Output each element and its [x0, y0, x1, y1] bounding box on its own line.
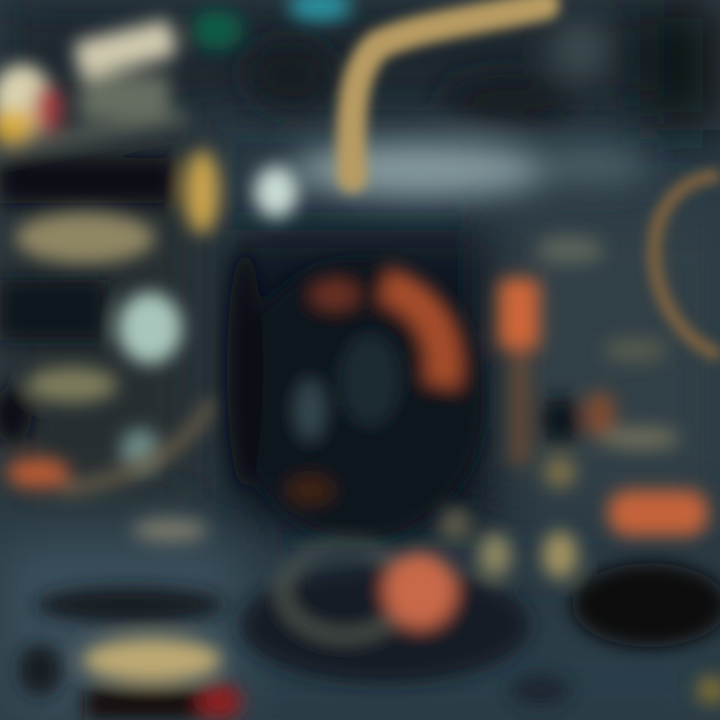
- icon: white and yellow sphere: [0, 64, 62, 141]
- tan knob faint: [439, 507, 471, 543]
- dark shelf interior: [0, 158, 175, 203]
- top left shelf objects: [0, 0, 352, 472]
- shelf edge: [0, 111, 189, 157]
- core highlight: [340, 334, 400, 426]
- tan block middle: [26, 367, 118, 403]
- red object bottom: [198, 684, 242, 720]
- lower dish and spheres: [240, 507, 720, 706]
- tan curved strut: [60, 400, 212, 490]
- tan spot: [544, 456, 576, 488]
- small pale sphere: [120, 428, 160, 472]
- dark top cavity: [245, 40, 335, 110]
- dark base under cylinder: [85, 688, 200, 720]
- yellow cylinder: [184, 150, 220, 234]
- cream knob two: [542, 531, 578, 579]
- yellow spot bottom right: [696, 676, 720, 704]
- brown column: [510, 355, 530, 465]
- orange capsule right: [608, 490, 708, 536]
- pipe: tan bent tube: [351, 5, 545, 178]
- orange coil: [385, 285, 444, 385]
- cream cylinder bottom: [82, 638, 222, 682]
- green object: [191, 10, 243, 50]
- tan strip lower: [132, 518, 208, 542]
- dark column left of engine: [227, 250, 263, 490]
- pale horizontal band: [290, 142, 550, 198]
- dark lower right mass: [572, 563, 720, 647]
- pale green sphere: [118, 292, 182, 364]
- orange sphere: [384, 552, 456, 628]
- white glow: [254, 166, 298, 218]
- orange capsule left: [6, 457, 70, 489]
- dark spot left: [0, 387, 32, 443]
- central dark engine with orange coil: [227, 236, 708, 540]
- small orange spot: [584, 391, 616, 439]
- shelf base: [80, 75, 170, 120]
- ring: tan arc on right edge: [654, 175, 720, 355]
- side highlight: [296, 380, 324, 440]
- tan strips on right: [600, 427, 680, 449]
- dish ring: [283, 544, 407, 636]
- orange rectangular block: [498, 278, 540, 350]
- cream knob one: [478, 533, 512, 577]
- red-brown glow low: [286, 476, 334, 504]
- dark band lower left: [35, 587, 225, 623]
- tan block upper: [15, 212, 155, 264]
- grey upper patch: [550, 20, 610, 80]
- dish dark shell: [240, 567, 530, 683]
- pale band right: [530, 147, 650, 183]
- dark spot lower left: [18, 644, 62, 696]
- dark upper cavity: [440, 74, 580, 126]
- dark spot right: [540, 396, 580, 444]
- left side tan objects: [0, 212, 242, 720]
- upper right details: [245, 20, 650, 198]
- dark spot bottom: [510, 674, 570, 706]
- engine dark core: [235, 260, 485, 540]
- dark shelf lower: [0, 280, 105, 340]
- orange coil left part: [311, 281, 359, 309]
- teal object: [288, 0, 352, 22]
- icon: cream box: [72, 18, 178, 80]
